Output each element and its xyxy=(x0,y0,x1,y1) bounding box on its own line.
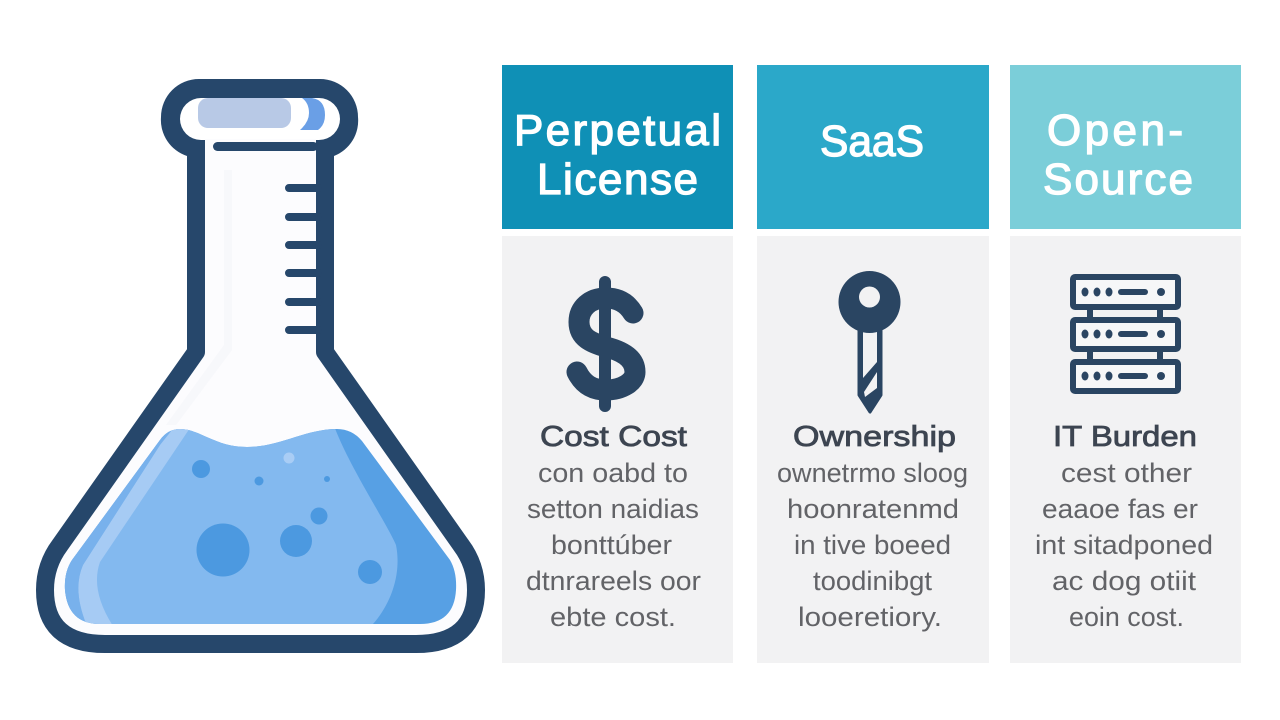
description: cost: bonttúber xyxy=(551,530,672,560)
card body: ownership xyxy=(757,236,989,663)
card body: it burden xyxy=(1010,236,1241,663)
header: open-source: Source xyxy=(1043,155,1193,204)
panel: saas xyxy=(757,65,989,663)
cap crescent xyxy=(300,98,325,130)
flask interior xyxy=(45,140,476,644)
bubbles xyxy=(192,460,382,584)
description: cost xyxy=(526,458,701,632)
header: saas xyxy=(757,65,989,229)
header: saas: SaaS xyxy=(820,117,924,166)
description: ownership: toodinibgt xyxy=(813,566,932,596)
heading: cost: Cost Cost xyxy=(540,421,687,453)
description: cost: con oabd to xyxy=(538,458,688,488)
description: ownership: hoonratenmd xyxy=(787,494,959,524)
panel: open-source xyxy=(1010,65,1241,663)
description: it burden: cest other xyxy=(1061,458,1192,488)
icon: key xyxy=(838,271,900,412)
rim inner bar xyxy=(213,142,318,151)
icon: laboratory flask xyxy=(45,79,476,644)
header: perpetual license: Perpetual xyxy=(514,106,721,155)
flask rim xyxy=(161,79,358,156)
description: cost: ebte cost. xyxy=(550,602,676,632)
description: cost: setton naidias xyxy=(527,494,699,524)
description: it burden: eaaoe fas er xyxy=(1042,494,1198,524)
header: open-source: Open- xyxy=(1047,106,1183,155)
cap highlight xyxy=(198,98,291,128)
description: it burden: eoin cost. xyxy=(1069,602,1184,632)
heading: it burden: IT Burden xyxy=(1053,421,1197,453)
header: open-source xyxy=(1010,65,1241,229)
header: perpetual license xyxy=(502,65,733,229)
flask body outline xyxy=(45,150,476,644)
description: cost: dtnrareels oor xyxy=(526,566,701,596)
description: ownership: ownetrmo sloog xyxy=(777,458,968,488)
icon: server rack xyxy=(1073,277,1178,391)
description: ownership: looeretiory. xyxy=(798,602,942,632)
description: ownership: in tive boeed xyxy=(794,530,951,560)
neck highlight xyxy=(166,170,232,425)
icon: dollar sign xyxy=(577,282,635,406)
panel: perpetual license xyxy=(502,65,733,663)
description: ownership xyxy=(777,458,968,632)
card body: cost xyxy=(502,236,733,663)
description: it burden: int sitadponed xyxy=(1035,530,1213,560)
measuring ticks xyxy=(289,188,318,330)
header: perpetual license: License xyxy=(537,155,698,204)
heading: ownership: Ownership xyxy=(793,421,956,453)
liquid xyxy=(60,420,460,630)
description: it burden: ac dog otiit xyxy=(1052,566,1197,596)
description: it burden xyxy=(1035,458,1213,632)
